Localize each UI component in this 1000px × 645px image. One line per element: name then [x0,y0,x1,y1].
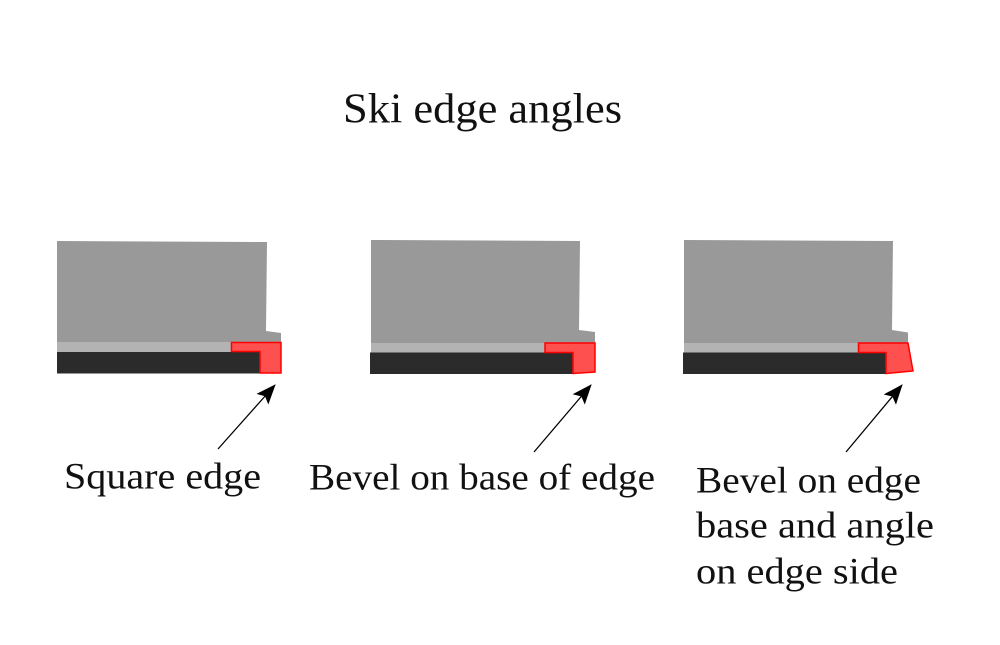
ski body [684,240,908,344]
label: Bevel on base of edge [309,458,655,498]
panel: square edge [57,241,281,498]
title: Ski edge angles [343,86,622,132]
black base [683,352,886,374]
red edge: square [232,342,281,373]
label: on edge side [696,552,898,592]
label: Bevel on edge [696,460,921,502]
arrow [534,385,591,452]
base layer band [684,343,859,353]
panel: bevel on base [309,240,655,498]
arrow [846,385,902,452]
label [696,460,934,592]
ski body [57,241,281,343]
label: base and angle [696,506,934,546]
ski body [371,240,595,344]
base layer band [57,342,232,352]
red edge: bevelled base [545,343,595,374]
panel: bevel and side angle [683,240,934,592]
base layer band [371,343,545,353]
label: Square edge [64,456,261,498]
black base [370,352,573,374]
red edge: bevel plus side angle [858,343,913,374]
black base [57,352,260,374]
arrow [218,385,275,449]
